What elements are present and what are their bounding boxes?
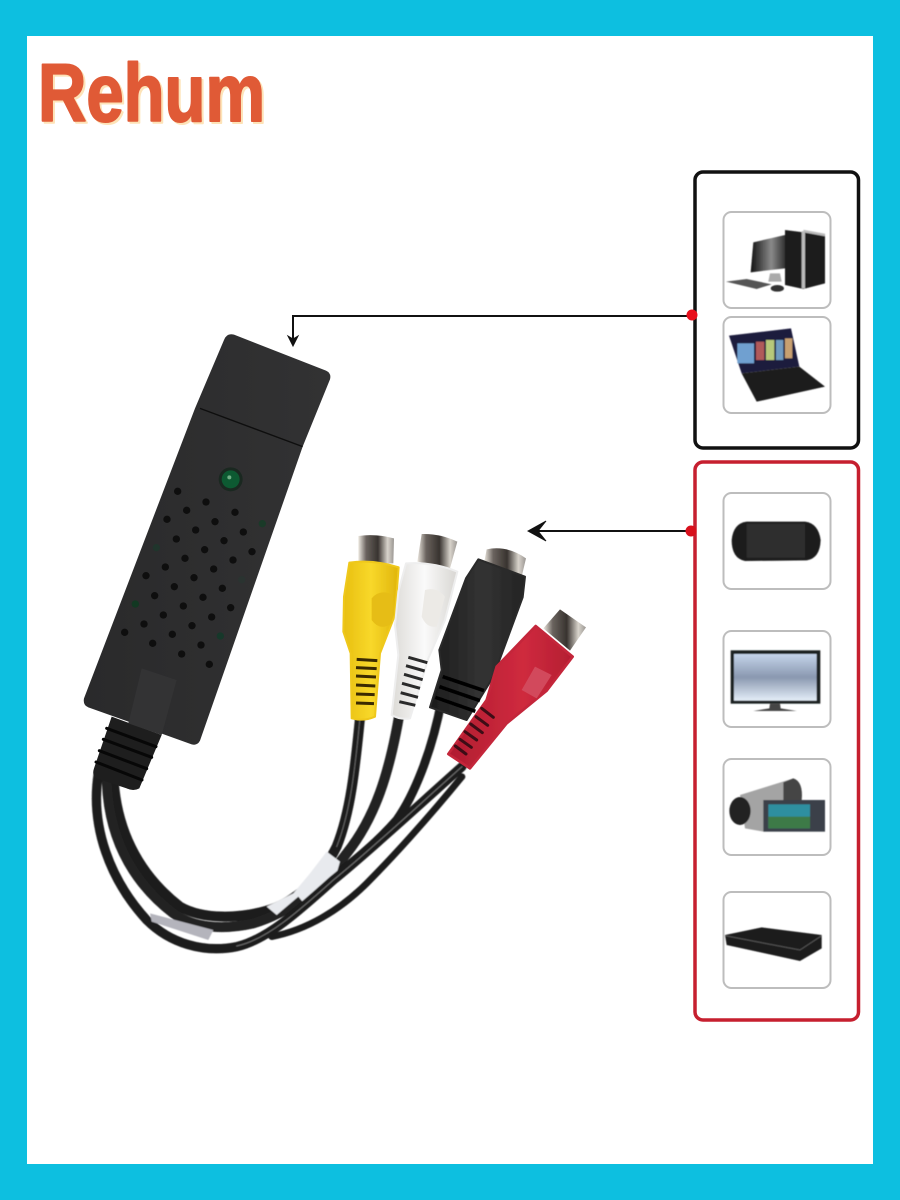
card: camcorder [724,759,830,855]
vent holes [121,488,266,668]
arrow: computers to USB plug [288,316,692,346]
card: laptop [724,317,830,413]
cable label: gray band [150,913,213,940]
card: desktop [724,212,830,308]
RCA and S-video connectors [343,534,586,768]
red RCA connector [448,609,586,768]
title: Rehum: Rehum [38,48,265,139]
LED [219,467,243,491]
card: television [724,631,830,727]
black S-video connector [430,548,526,720]
white RCA connector [392,534,457,719]
arrow: AV sources to connectors [528,521,692,541]
yellow RCA connector [343,535,399,720]
panel: AV sources [695,462,858,1020]
connector dot: AV sources [686,526,696,536]
title: Rehum: Rehum [40,50,267,141]
cables bundle [96,700,462,949]
cable label: white sleeve [267,852,340,915]
cable collar [128,668,177,735]
dongle body [84,334,330,745]
USB capture dongle [84,334,330,790]
outer cable [96,767,462,949]
USB plug seam [200,408,303,447]
panel: computers [695,172,858,448]
card: media player [724,892,830,988]
card: handheld console [724,493,830,589]
connector dot: computers [686,310,698,320]
strain relief grommet [93,717,162,790]
